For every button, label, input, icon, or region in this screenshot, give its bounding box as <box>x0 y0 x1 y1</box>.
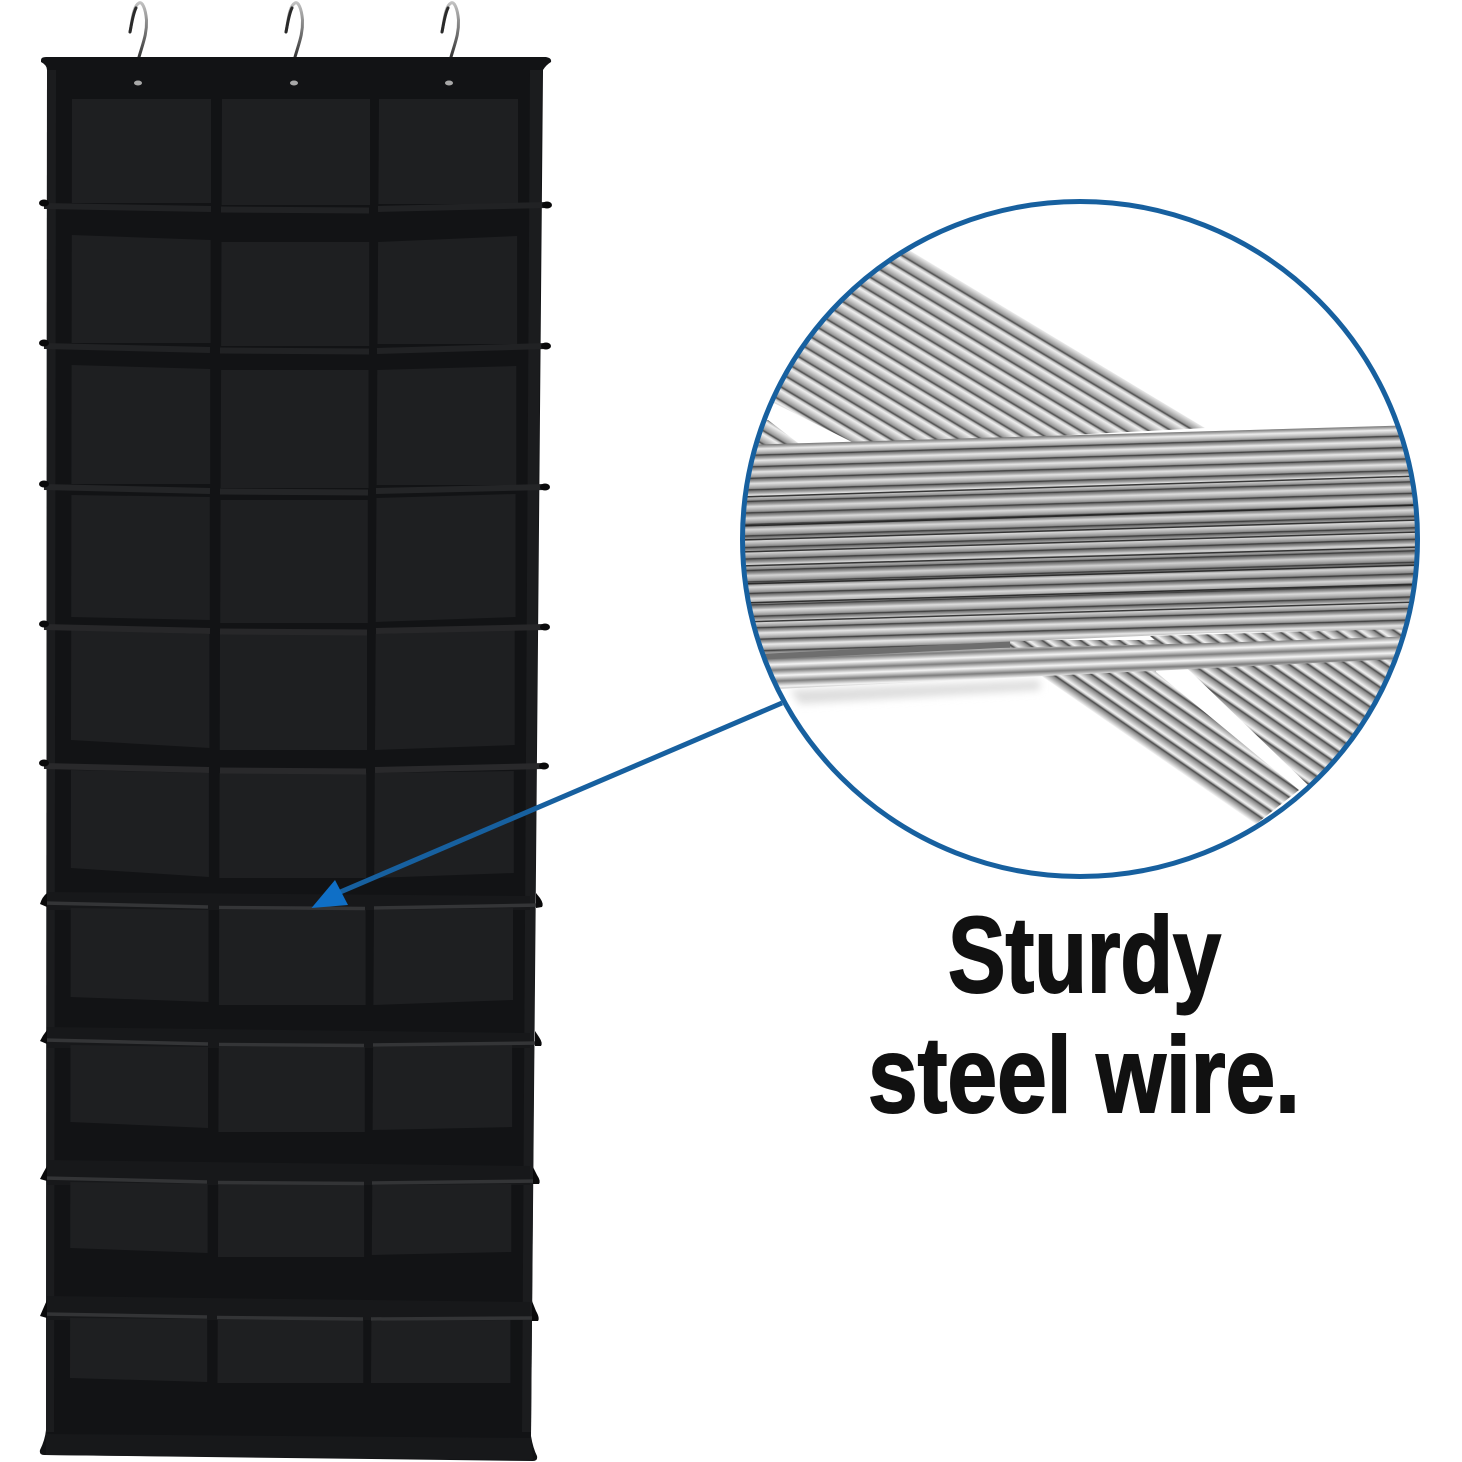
lower shelf rod highlights <box>44 903 541 1319</box>
lower diagonal wire bundles <box>1000 640 1299 824</box>
heading: sturdy steel wire <box>868 894 1300 1135</box>
heading line one: Sturdy <box>948 894 1221 1015</box>
gap fill under main bundle <box>765 642 1010 660</box>
soft shadow below wires <box>790 680 1040 704</box>
dark gaps between wires <box>740 476 1420 622</box>
hanging hooks <box>130 3 459 57</box>
rod end tips <box>39 200 552 1321</box>
panel: black hanging organizer <box>39 3 552 1461</box>
organizer body <box>40 57 551 1461</box>
callout: steel wire close-up circle <box>700 202 1425 876</box>
main horizontal wire bundle <box>740 425 1420 655</box>
front loose wires <box>755 636 1420 689</box>
mesh pocket panels <box>70 99 518 1383</box>
steel wire photo <box>745 250 1415 824</box>
arrow from callout to organizer <box>312 703 782 908</box>
lower shelf front flaps <box>46 892 533 1460</box>
eyelets <box>134 80 453 86</box>
shelf rods <box>44 205 547 772</box>
circle border <box>742 202 1418 876</box>
body side strips <box>46 70 542 1432</box>
heading line two: steel wire. <box>868 1014 1300 1135</box>
upper diagonal wire bundle <box>774 250 1204 442</box>
